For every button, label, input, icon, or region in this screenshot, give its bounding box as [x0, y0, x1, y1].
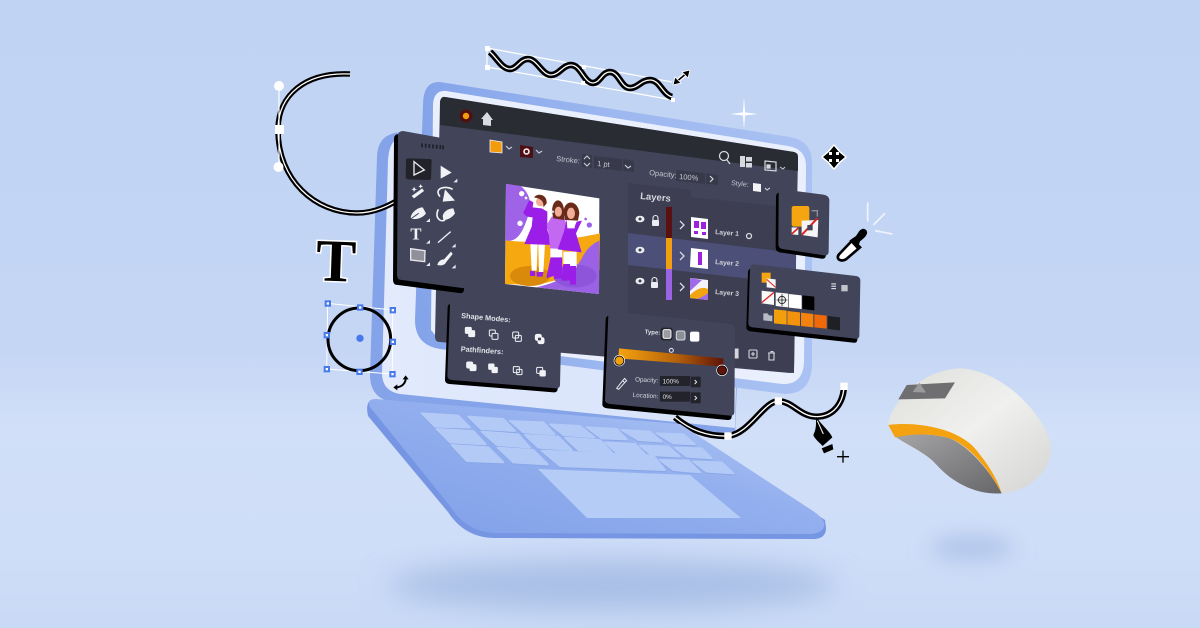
scroll button — [898, 382, 955, 399]
gradient start stop — [615, 356, 624, 365]
layer 2 thumbnail — [690, 248, 708, 269]
curvature tool — [437, 208, 455, 221]
gradient end stop — [717, 366, 727, 375]
laptop lid back panel — [370, 132, 740, 436]
selected circle with handles — [325, 301, 395, 376]
shape modes panel — [445, 301, 562, 392]
layer 3 label: Layer 3 — [715, 289, 739, 298]
brush tool — [437, 252, 453, 265]
layers title: Layers — [640, 191, 671, 205]
opacity stepper — [695, 380, 697, 384]
layer 1 thumbnail — [691, 217, 708, 239]
workspace chevron — [780, 167, 785, 169]
swap arrow — [812, 211, 817, 217]
layer 3 thumbnail — [690, 278, 708, 300]
child one — [523, 195, 553, 277]
layer 2 label: Layer 2 — [715, 259, 739, 268]
type tool: T — [410, 224, 421, 243]
eyedropper icon — [617, 378, 627, 389]
opacity arrow — [710, 176, 713, 182]
gradient bar — [618, 348, 723, 367]
lasso tool — [438, 187, 455, 202]
shape modes title: Shape Modes: — [461, 311, 511, 324]
pathfinders title: Pathfinders: — [461, 344, 504, 356]
resize arrow — [673, 70, 690, 85]
magic wand — [411, 184, 424, 198]
none chip — [767, 278, 776, 288]
orange chip — [762, 273, 771, 283]
rotate arrow — [393, 375, 409, 390]
layer 1 label: Layer 1 — [715, 229, 739, 238]
trackpad — [538, 469, 741, 518]
stroke square — [802, 218, 818, 237]
style swatch — [753, 183, 761, 192]
stroke chevron — [536, 150, 542, 153]
line tool — [438, 232, 451, 243]
artwork illustration — [505, 184, 600, 294]
stroke value: 1 pt — [597, 159, 611, 169]
location stepper — [695, 396, 697, 400]
search icon — [720, 152, 730, 164]
visibility and lock icons — [636, 216, 659, 288]
layer chevrons — [680, 221, 684, 291]
none swatch — [792, 227, 798, 235]
toolbar field boxes — [582, 154, 718, 185]
fill square — [792, 206, 809, 227]
pathfinder icons — [467, 362, 545, 376]
location label: Location: — [633, 392, 659, 400]
mouse stripe — [888, 424, 1002, 493]
keyboard key shadows — [422, 414, 733, 474]
rectangle tool — [411, 249, 425, 262]
grip — [422, 143, 443, 149]
layers footer icons — [735, 349, 775, 360]
big curve with bezier handles — [274, 74, 398, 213]
stroke label: Stroke: — [556, 154, 580, 165]
window header bar — [440, 97, 798, 171]
style label: Style: — [731, 180, 749, 189]
pen nib — [813, 417, 833, 453]
opacity value: 100% — [679, 172, 699, 183]
gradient panel — [602, 311, 735, 420]
eye pupils — [638, 218, 642, 282]
layout icon — [740, 156, 752, 168]
type options — [661, 328, 699, 342]
selection tool — [414, 162, 424, 175]
computer mouse — [888, 368, 1051, 493]
orange palette — [774, 309, 840, 330]
mouse side — [895, 434, 1002, 493]
white swatch — [789, 294, 802, 309]
opacity label: Opacity: — [649, 168, 677, 180]
laptop floor shadow — [387, 560, 837, 610]
layers panel — [628, 183, 796, 373]
stroke spinner — [584, 156, 590, 166]
tool corner markers — [426, 179, 457, 268]
sparkle — [732, 100, 756, 127]
layer colour bar — [666, 207, 672, 300]
end stop ring — [717, 365, 727, 376]
T glyph object: T — [315, 227, 357, 295]
tool panel shadow — [393, 134, 466, 293]
shape mode hole — [538, 338, 541, 340]
pen curve — [675, 383, 849, 463]
deck top — [369, 399, 824, 534]
location value: 0% — [663, 394, 672, 401]
direct selection tool — [441, 166, 452, 179]
stroke swatch — [520, 145, 533, 158]
move cursor — [823, 146, 845, 168]
opacity label: Opacity: — [635, 376, 659, 385]
laptop keyboard deck — [367, 399, 826, 539]
shape mode icons — [465, 327, 544, 344]
opacity value: 100% — [663, 378, 679, 385]
layer 2 highlight — [628, 233, 796, 284]
stroke dropdown — [625, 165, 631, 168]
mouse floor shadow — [930, 537, 1014, 559]
type label: Type: — [645, 330, 660, 337]
folder — [763, 313, 772, 321]
eyedropper tool — [838, 202, 892, 260]
fill swatch — [490, 140, 502, 153]
plus — [837, 451, 849, 463]
list and grid icons — [831, 283, 848, 291]
sparks — [868, 202, 892, 234]
style chevron — [765, 188, 770, 190]
app logo — [460, 110, 472, 122]
home icon — [481, 112, 493, 126]
white slash swatch — [762, 291, 774, 305]
layer 1 target — [746, 234, 752, 238]
swatches panel — [746, 264, 860, 343]
gradient midpoint — [669, 348, 673, 352]
child three — [558, 202, 582, 285]
mouse body — [888, 368, 1051, 493]
registration swatch — [776, 292, 788, 307]
fill chevron — [506, 146, 512, 149]
black swatch — [802, 295, 814, 310]
laptop screen frame — [415, 82, 812, 394]
wheel highlight — [913, 383, 926, 393]
pen tool — [411, 207, 426, 219]
keyboard keys — [422, 413, 733, 473]
deck edge — [367, 400, 826, 539]
tool panel — [393, 131, 469, 293]
location field — [660, 392, 701, 403]
workspace icon — [765, 161, 776, 171]
application window — [435, 97, 798, 373]
tool panel body — [397, 131, 469, 288]
colour panel — [776, 189, 829, 259]
child two — [547, 200, 567, 279]
opacity field — [660, 376, 701, 387]
selection tool tile — [406, 158, 432, 180]
wavy line with bounding box — [485, 46, 675, 102]
start stop ring — [614, 355, 625, 366]
